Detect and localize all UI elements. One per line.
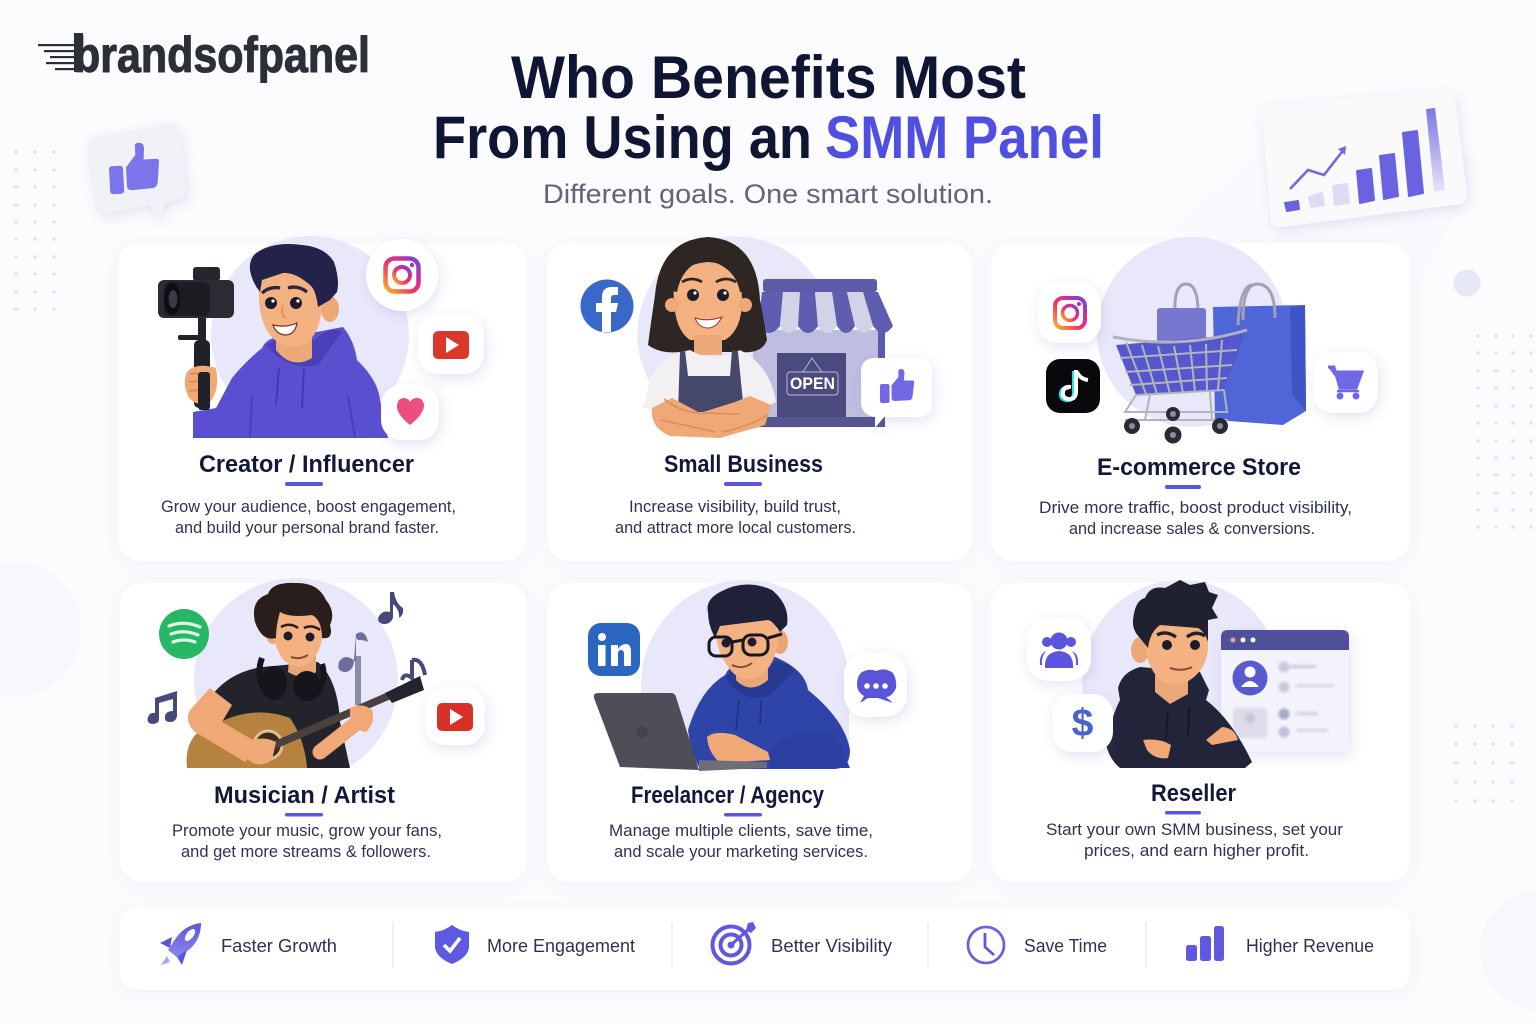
icon: TikTok tile xyxy=(1046,359,1100,413)
description: and scale your marketing services. xyxy=(614,842,868,861)
illustration: shop owner and storefront xyxy=(637,236,893,438)
illustration: freelancer with laptop xyxy=(594,580,850,771)
icon: Facebook xyxy=(580,280,634,332)
panel: E-commerce Store xyxy=(991,237,1410,561)
description: and increase sales & conversions. xyxy=(1069,519,1315,538)
panel: Creator / Influencer xyxy=(158,236,486,536)
description: Drive more traffic, boost product visibility, xyxy=(1039,498,1352,517)
benefit: More Engagement: More Engagement xyxy=(487,935,635,956)
icon: like bubble xyxy=(861,358,932,428)
benefit: More Engagement xyxy=(435,925,635,964)
illustration: shop owner and storefront: OPEN xyxy=(790,375,835,393)
benefit: Faster Growth: Faster Growth xyxy=(221,935,337,956)
heading: Small Business xyxy=(664,451,823,478)
description xyxy=(609,821,873,861)
heading: Reseller xyxy=(1151,780,1236,807)
description: Grow your audience, boost engagement, xyxy=(161,497,456,516)
description: Increase visibility, build trust, xyxy=(629,497,841,516)
subtitle: Different goals. One smart solution. xyxy=(543,179,993,209)
illustration: creator with camera xyxy=(158,236,409,438)
icon: cart tile xyxy=(1313,352,1378,413)
icon: heart badge xyxy=(381,385,439,440)
benefit: Better Visibility xyxy=(712,922,893,964)
logo: brandsofpanel: brandsofpanel xyxy=(74,27,370,83)
heading: Creator / Influencer xyxy=(199,451,414,478)
description xyxy=(1039,498,1352,538)
benefit: Save Time: Save Time xyxy=(1024,935,1107,956)
description: prices, and earn higher profit. xyxy=(1084,841,1309,860)
title xyxy=(433,44,1104,171)
icon: chat tile xyxy=(844,653,907,717)
icon: thumbs up speech bubble xyxy=(88,124,186,220)
icon: growth chart card xyxy=(1262,91,1467,227)
benefit: Faster Growth xyxy=(160,923,337,965)
description xyxy=(1046,820,1343,860)
benefit: Better Visibility: Better Visibility xyxy=(771,935,893,956)
description xyxy=(172,821,442,861)
icon: dollar tile xyxy=(1052,694,1113,752)
panel: Reseller xyxy=(1032,580,1352,860)
description: and attract more local customers. xyxy=(615,518,856,537)
icon: LinkedIn xyxy=(588,623,640,676)
description: Manage multiple clients, save time, xyxy=(609,821,873,840)
panel: Musician / Artist xyxy=(148,578,488,860)
illustration: musician with guitar xyxy=(187,578,425,782)
description: Start your own SMM business, set your xyxy=(1046,820,1343,839)
description: Promote your music, grow your fans, xyxy=(172,821,442,840)
benefit: Higher Revenue xyxy=(1186,926,1374,961)
illustration: reseller and dashboard xyxy=(1082,580,1349,778)
title: SMM Panel xyxy=(825,104,1104,171)
title: From Using an xyxy=(433,104,812,171)
icon: YouTube tile xyxy=(425,687,485,745)
icon: Instagram tile xyxy=(1038,283,1101,343)
icon: dollar tile: $ xyxy=(1072,702,1094,745)
icon: Spotify xyxy=(159,609,209,659)
icon: YouTube badge xyxy=(418,315,484,374)
benefit: Higher Revenue: Higher Revenue xyxy=(1246,935,1374,956)
description xyxy=(161,497,456,537)
illustration: shopping cart and bags xyxy=(1097,237,1306,444)
heading: E-commerce Store xyxy=(1097,454,1301,481)
description: and build your personal brand faster. xyxy=(175,518,439,537)
heading: Freelancer / Agency xyxy=(631,782,825,809)
description: and get more streams & followers. xyxy=(181,842,431,861)
heading: Musician / Artist xyxy=(214,782,395,809)
icon: Instagram badge xyxy=(366,239,438,311)
panel: Freelancer / Agency xyxy=(588,580,910,860)
icon: users tile xyxy=(1027,618,1091,681)
panel: Small Business xyxy=(580,236,934,533)
description xyxy=(615,497,856,537)
icon: music notes xyxy=(148,592,403,724)
title: Who Benefits Most xyxy=(511,44,1026,111)
benefit: Save Time xyxy=(968,927,1107,963)
panel: benefits bar xyxy=(120,907,1410,990)
